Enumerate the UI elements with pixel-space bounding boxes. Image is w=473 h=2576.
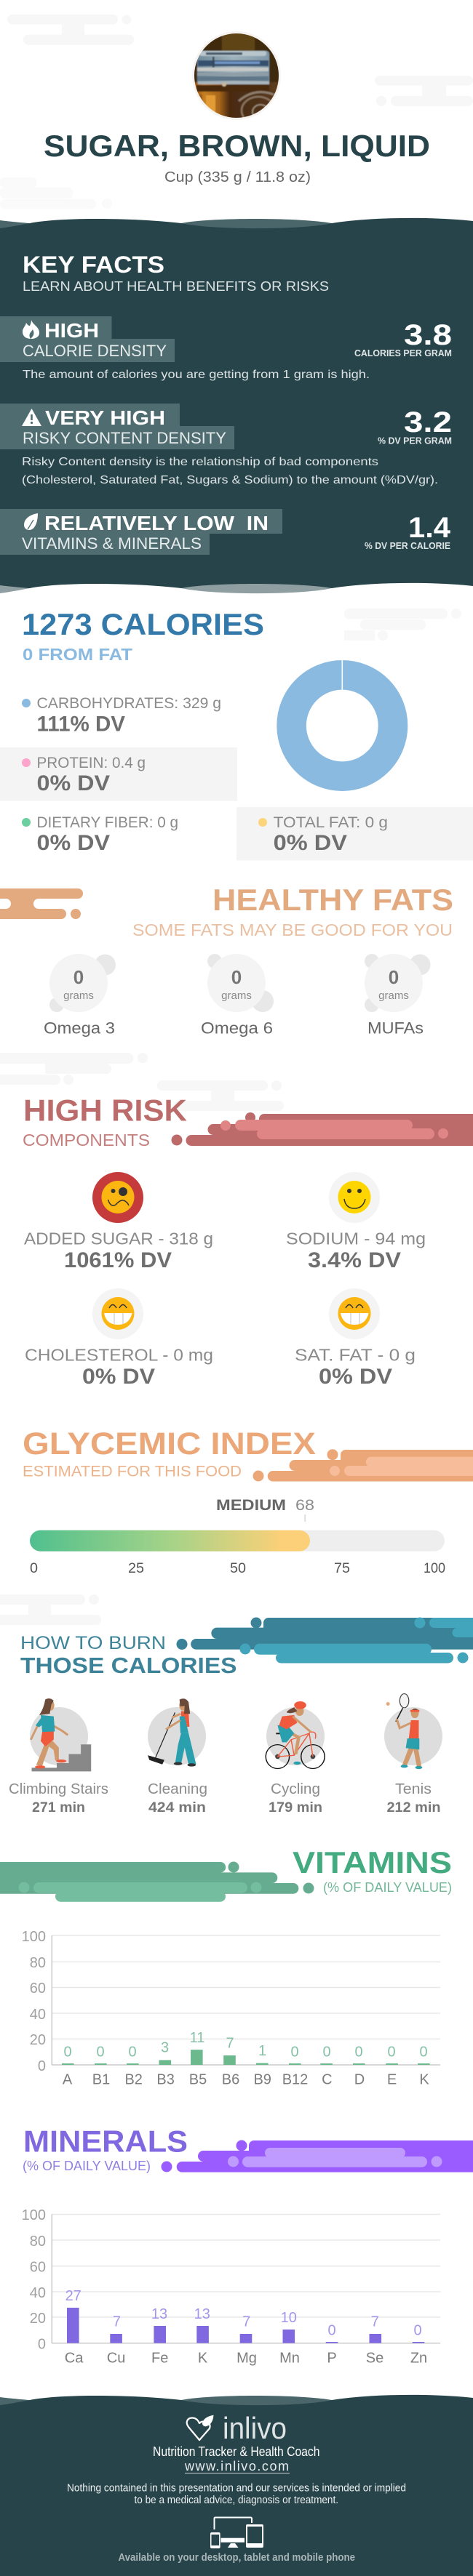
gauge bar [30, 1530, 445, 1552]
y axis labels: 40 [30, 2007, 46, 2023]
high risk subheading: COMPONENTS [23, 1131, 150, 1149]
value labels: 0 [322, 2045, 331, 2061]
panel: glycemic index [23, 1427, 473, 1576]
macro: dietary fiber: 0% DV [36, 831, 110, 855]
donut chart [292, 659, 393, 777]
y axis labels: 60 [30, 1981, 46, 1997]
category labels: Cu [107, 2350, 125, 2366]
bars [67, 2308, 424, 2343]
icon: woman sweeping [148, 1698, 196, 1767]
item: cholesterol: CHOLESTEROL - 0 mg [25, 1346, 213, 1365]
category labels: Zn [410, 2350, 427, 2366]
category labels: B3 [156, 2071, 175, 2087]
y axis labels [22, 2207, 46, 2353]
icon: woman cycling [266, 1701, 325, 1768]
decorative bars [176, 1617, 473, 1664]
category labels: P [327, 2350, 337, 2366]
activity: cycling: Cycling [271, 1781, 320, 1797]
icon: grinning face [329, 1288, 380, 1339]
category labels [63, 2071, 429, 2087]
fact: calorie density: 3.8 [404, 319, 452, 351]
high risk heading: HIGH RISK [23, 1094, 187, 1128]
value labels: 7 [113, 2314, 121, 2330]
panel: footer [0, 2395, 473, 2576]
macro: total fat: TOTAL FAT: 0 g [274, 814, 388, 831]
stat: omega 3: grams [63, 990, 94, 1002]
value labels: 0 [354, 2045, 363, 2061]
icon: smiling face [329, 1172, 380, 1223]
decorative bars [172, 1112, 473, 1146]
value labels [65, 2288, 422, 2339]
stat: mufas: 0 [389, 966, 399, 988]
fact: calorie density: The amount of calories you are getting from 1 gram is high. [23, 369, 370, 381]
healthy fats heading: HEALTHY FATS [212, 883, 453, 917]
background cloud: burn [0, 1594, 101, 1625]
panel: how to burn those calories [9, 1617, 473, 1815]
panel: vitamins [0, 1845, 452, 2087]
disclaimer [67, 2482, 406, 2506]
category labels: Ca [65, 2350, 84, 2366]
footer wave [0, 2395, 473, 2576]
item: saturated fat: 0% DV [319, 1365, 392, 1389]
stat: mufas: MUFAs [367, 1019, 424, 1038]
category labels: Mg [236, 2350, 257, 2366]
fact: vitamins and minerals [0, 509, 451, 555]
y axis labels: 0 [38, 2058, 46, 2074]
item: cholesterol [25, 1288, 213, 1389]
value labels: 3 [161, 2040, 169, 2056]
value labels: 0 [387, 2045, 396, 2061]
website link: www.inlivo.com [184, 2459, 289, 2473]
gauge axis: 100 [424, 1561, 445, 1576]
panel: healthy fats [0, 883, 453, 1038]
icon: flame [23, 320, 39, 339]
stat: omega 3: 0 [73, 966, 84, 988]
value labels: 10 [281, 2310, 297, 2326]
wave top [0, 218, 473, 589]
panel: minerals [22, 2124, 473, 2366]
macro: dietary fiber [22, 814, 178, 855]
disclaimer: to be a medical advice, diagnosis or treatment. [134, 2494, 338, 2506]
bar chart: vitamins [22, 1929, 440, 2087]
activity: climbing stairs: Climbing Stairs [9, 1781, 108, 1797]
activity: tennis: Tenis [395, 1781, 432, 1797]
tagline: Nutrition Tracker & Health Coach [153, 2444, 320, 2459]
calories heading: 1273 CALORIES [22, 607, 264, 641]
calories from fat: 0 FROM FAT [23, 645, 132, 664]
value labels: 1 [258, 2043, 266, 2059]
activity: climbing stairs [9, 1698, 108, 1815]
wave bottom [0, 583, 473, 603]
gauge label: 68 [295, 1497, 314, 1514]
value labels: 0 [327, 2323, 336, 2339]
item: sodium [286, 1172, 426, 1272]
value labels: 0 [290, 2045, 299, 2061]
bars [62, 2050, 430, 2065]
fact: vitamins and minerals: 1.4 [408, 512, 451, 544]
value labels: 0 [128, 2045, 137, 2061]
disclaimer: Nothing contained in this presentation and our services is intended or implied [67, 2482, 406, 2495]
fact: risky content density: VERY HIGH [45, 406, 165, 429]
item: added sugar: 1061% DV [64, 1248, 172, 1272]
activity: cycling: 179 min [269, 1800, 322, 1815]
value labels: 7 [242, 2314, 250, 2330]
stat: omega 3 [44, 954, 116, 1038]
healthy fats subheading: SOME FATS MAY BE GOOD FOR YOU [132, 920, 453, 939]
glycemic heading: GLYCEMIC INDEX [23, 1427, 316, 1461]
y axis labels: 100 [22, 2207, 46, 2223]
stat: omega 6: 0 [231, 966, 242, 988]
gauge axis: 75 [334, 1561, 350, 1576]
category labels: B6 [222, 2071, 239, 2087]
key facts heading: KEY FACTS [23, 252, 164, 278]
icon: heart with leaf [187, 2415, 214, 2440]
macro: protein [0, 747, 237, 801]
glycemic subheading: ESTIMATED FOR THIS FOOD [23, 1463, 242, 1480]
y axis labels [22, 1929, 46, 2074]
burn heading line 1: HOW TO BURN [20, 1633, 166, 1653]
fact: risky content density: Risky Content density is the relationship of bad components [22, 456, 378, 468]
icon: desktop, tablet and phone [210, 2517, 263, 2548]
value labels: 0 [419, 2045, 428, 2061]
value labels: 7 [371, 2314, 379, 2330]
y axis labels: 80 [30, 1955, 46, 1971]
stat: mufas: grams [378, 990, 409, 1002]
stat: omega 6: Omega 6 [201, 1019, 273, 1038]
vitamins heading: VITAMINS [293, 1845, 452, 1879]
availability note: Available on your desktop, tablet and mobile phone [118, 2551, 355, 2564]
category labels: Fe [151, 2350, 168, 2366]
activity: cleaning: 424 min [148, 1800, 206, 1815]
value labels [63, 2030, 428, 2061]
category labels: K [198, 2350, 208, 2366]
background clouds: high risk [0, 1053, 284, 1111]
icon: man playing tennis [386, 1694, 422, 1769]
macro: protein: 0% DV [36, 771, 110, 795]
item: saturated fat [295, 1288, 416, 1389]
activity: cycling [266, 1701, 325, 1815]
item: added sugar [24, 1172, 213, 1272]
panel: calories [0, 607, 473, 861]
fact: calorie density [0, 316, 452, 381]
macro: protein: PROTEIN: 0.4 g [36, 755, 146, 771]
gauge axis: 0 [30, 1561, 38, 1576]
icon: warning triangle [22, 409, 41, 426]
category labels: B1 [92, 2071, 110, 2087]
activity: climbing stairs: 271 min [32, 1800, 85, 1815]
value labels: 13 [194, 2306, 210, 2322]
food photo: jar of liquid brown sugar [192, 31, 281, 124]
value labels: 13 [151, 2306, 167, 2322]
decorative bars [253, 1449, 473, 1482]
background cloud [344, 609, 461, 641]
category labels: K [419, 2071, 429, 2087]
fact: vitamins and minerals: VITAMINS & MINERALS [22, 534, 202, 553]
icon: worried face [92, 1172, 143, 1223]
macro: dietary fiber: DIETARY FIBER: 0 g [36, 814, 178, 831]
fact: risky content density: (Cholesterol, Saturated Fat, Sugars & Sodium) to the amount (%DV/gr). [22, 474, 438, 486]
item: cholesterol: 0% DV [82, 1365, 155, 1389]
macro: carbohydrates [22, 695, 221, 737]
logo [187, 2411, 287, 2445]
stat: mufas [365, 954, 431, 1038]
y axis labels: 0 [38, 2337, 46, 2353]
gauge axis [30, 1561, 445, 1576]
category labels: D [354, 2071, 365, 2087]
y axis labels: 40 [30, 2285, 46, 2301]
activity: tennis: 212 min [387, 1800, 441, 1815]
fact: calorie density: CALORIES PER GRAM [354, 348, 452, 358]
activity: tennis [384, 1694, 442, 1815]
category labels: B2 [124, 2071, 143, 2087]
y axis labels: 20 [30, 2311, 46, 2327]
category labels: B12 [282, 2071, 308, 2087]
y axis labels: 100 [22, 1929, 46, 1945]
stat: omega 6 [201, 954, 274, 1038]
category labels: C [322, 2071, 333, 2087]
y axis labels: 20 [30, 2032, 46, 2048]
minerals heading: MINERALS [23, 2124, 188, 2158]
burn heading line 2: THOSE CALORIES [20, 1653, 237, 1678]
bar chart: minerals [22, 2207, 440, 2366]
category labels: A [63, 2071, 73, 2087]
decorative bars [0, 888, 83, 919]
gauge axis: 25 [128, 1561, 144, 1576]
category labels: B5 [189, 2071, 207, 2087]
icon: woman climbing stairs [31, 1698, 91, 1771]
y axis labels: 80 [30, 2234, 46, 2250]
decorative bars [162, 2140, 473, 2172]
item: saturated fat: SAT. FAT - 0 g [295, 1346, 416, 1365]
key facts subheading: LEARN ABOUT HEALTH BENEFITS OR RISKS [23, 278, 329, 294]
macro: carbohydrates: CARBOHYDRATES: 329 g [36, 695, 221, 712]
fact: vitamins and minerals: RELATIVELY LOW IN [44, 512, 269, 534]
activity: cleaning [148, 1698, 207, 1815]
icon: leaf [24, 513, 38, 530]
background clouds: header [0, 15, 473, 209]
value labels: 0 [96, 2045, 105, 2061]
minerals subheading: (% OF DAILY VALUE) [23, 2158, 151, 2173]
vitamins subheading: (% OF DAILY VALUE) [323, 1879, 452, 1895]
fact: risky content density: % DV PER GRAM [378, 436, 452, 446]
value labels: 0 [413, 2323, 422, 2339]
category labels [65, 2350, 427, 2366]
value labels: 27 [65, 2288, 82, 2304]
logo: inlivo [223, 2411, 287, 2445]
icon: grinning face [92, 1288, 143, 1339]
value labels: 0 [63, 2045, 72, 2061]
value labels: 11 [190, 2030, 204, 2046]
panel: high risk components [23, 1094, 473, 1389]
panel: key facts [0, 218, 473, 603]
stat: omega 6: grams [221, 990, 252, 1002]
macro: total fat [236, 807, 473, 861]
fact: calorie density: HIGH [44, 319, 99, 342]
macro: total fat: 0% DV [274, 831, 347, 855]
gauge label: MEDIUM [216, 1497, 286, 1514]
serving size: Cup (335 g / 11.8 oz) [164, 169, 311, 185]
fact: risky content density [0, 404, 452, 486]
item: sodium: SODIUM - 94 mg [286, 1229, 426, 1248]
fact: calorie density: CALORIE DENSITY [23, 342, 167, 360]
fact: vitamins and minerals: % DV PER CALORIE [365, 541, 450, 551]
fact: risky content density: 3.2 [404, 406, 452, 438]
gauge axis: 50 [230, 1561, 246, 1576]
item: added sugar: ADDED SUGAR - 318 g [24, 1229, 213, 1248]
decorative bars [0, 1861, 314, 1902]
y axis labels: 60 [30, 2260, 46, 2276]
item: sodium: 3.4% DV [308, 1248, 401, 1272]
category labels: Mn [279, 2350, 300, 2366]
activity: cleaning: Cleaning [148, 1781, 207, 1797]
stat: omega 3: Omega 3 [44, 1019, 115, 1038]
category labels: E [387, 2071, 397, 2087]
value labels: 7 [226, 2036, 234, 2052]
fact: risky content density: RISKY CONTENT DENSITY [23, 429, 226, 447]
macro: carbohydrates: 111% DV [36, 713, 125, 737]
gauge label [216, 1497, 314, 1522]
category labels: B9 [253, 2071, 271, 2087]
category labels: Se [366, 2350, 383, 2366]
title: SUGAR, BROWN, LIQUID [44, 129, 430, 163]
